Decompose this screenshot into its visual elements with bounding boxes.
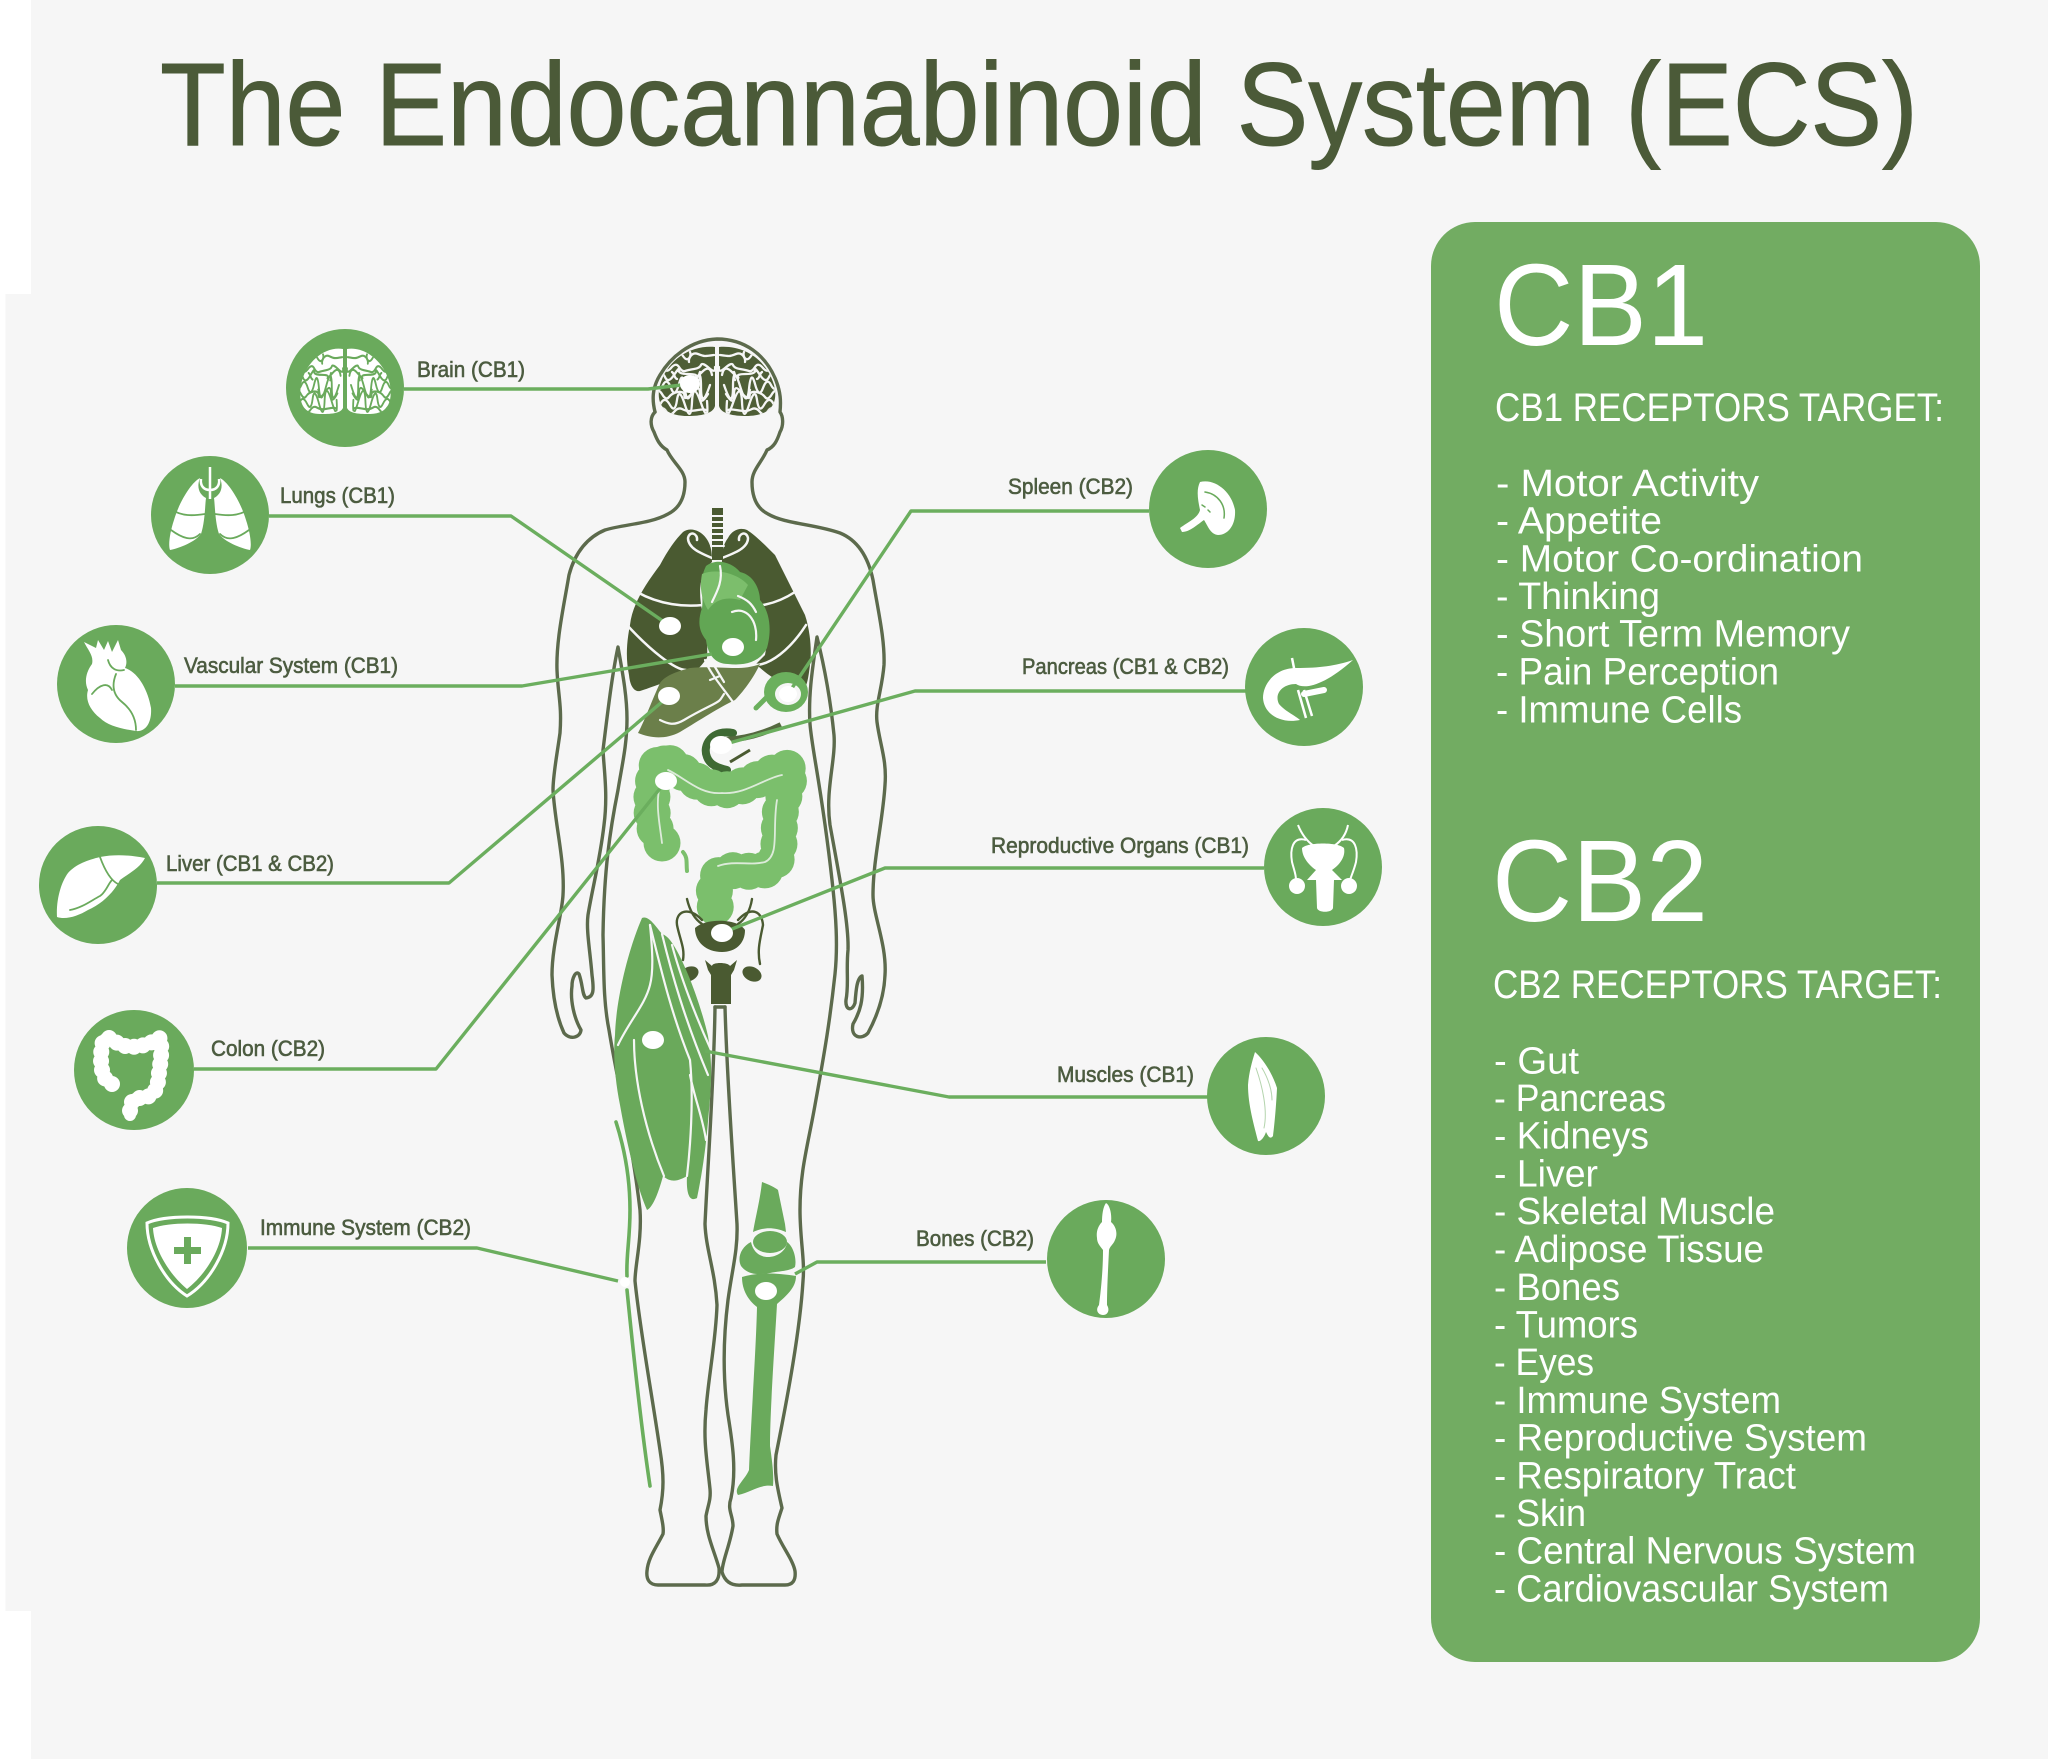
icon: heart xyxy=(57,625,175,743)
CB2 target list: - Gut xyxy=(1494,1040,1579,1082)
CB2 target list: - Cardiovascular System xyxy=(1494,1568,1889,1610)
marker dots xyxy=(642,375,797,1300)
organ: leg bones xyxy=(737,1182,796,1495)
CB1 target list: - Short Term Memory xyxy=(1496,614,1850,656)
organ: lungs and trachea xyxy=(627,508,811,691)
icon: bone xyxy=(1047,1200,1165,1318)
CB1 subheading: CB1 RECEPTORS TARGET: xyxy=(1495,386,1944,430)
organ: thigh muscles xyxy=(614,917,711,1210)
CB2 target list: - Skeletal Muscle xyxy=(1494,1191,1775,1233)
icon: immune shield xyxy=(127,1188,247,1308)
labels: Pancreas (CB1 & CB2) xyxy=(1022,654,1229,679)
icon: lungs xyxy=(151,456,269,574)
icon: pancreas xyxy=(1245,628,1363,746)
labels xyxy=(166,357,1249,1251)
CB1 target list: - Pain Perception xyxy=(1496,652,1779,694)
CB2 target list: - Bones xyxy=(1494,1267,1620,1309)
CB2 target list xyxy=(1494,1040,1916,1610)
CB2 target list: - Tumors xyxy=(1494,1304,1638,1346)
icon: spleen xyxy=(1149,450,1267,568)
icon: colon xyxy=(74,1010,194,1130)
CB2 target list: - Respiratory Tract xyxy=(1494,1456,1796,1498)
icon: reproductive organs xyxy=(1264,808,1382,926)
organ: liver xyxy=(638,660,760,737)
CB2 target list: - Pancreas xyxy=(1494,1078,1666,1120)
organ: brain xyxy=(652,347,782,416)
organ: skin line xyxy=(616,1122,650,1486)
CB2 heading: CB2 xyxy=(1492,816,1708,946)
CB1 target list: - Motor Co-ordination xyxy=(1496,538,1863,580)
CB2 target list: - Reproductive System xyxy=(1494,1418,1867,1460)
labels: Brain (CB1) xyxy=(417,357,525,382)
organ: pancreas xyxy=(706,725,781,770)
labels: Vascular System (CB1) xyxy=(184,653,398,678)
CB2 target list: - Central Nervous System xyxy=(1494,1531,1916,1573)
labels: Immune System (CB2) xyxy=(260,1215,471,1240)
organ: heart xyxy=(699,562,770,664)
labels: Reproductive Organs (CB1) xyxy=(991,833,1249,858)
CB2 subheading: CB2 RECEPTORS TARGET: xyxy=(1493,963,1942,1007)
labels: Muscles (CB1) xyxy=(1057,1062,1194,1087)
human body outline xyxy=(552,339,885,1585)
panel: receptor targets xyxy=(1431,222,1980,1662)
CB1 target list: - Appetite xyxy=(1496,500,1662,542)
labels: Lungs (CB1) xyxy=(280,483,395,508)
CB2 target list: - Kidneys xyxy=(1494,1116,1649,1158)
CB2 target list: - Adipose Tissue xyxy=(1494,1229,1764,1271)
connector lines xyxy=(157,384,1264,1281)
labels: Spleen (CB2) xyxy=(1008,474,1133,499)
CB1 target list: - Thinking xyxy=(1496,576,1660,618)
CB1 target list: - Immune Cells xyxy=(1496,690,1742,732)
CB1 target list: - Motor Activity xyxy=(1496,463,1759,505)
icon: liver xyxy=(39,826,157,944)
CB2 target list: - Eyes xyxy=(1494,1342,1594,1384)
icon: brain xyxy=(286,329,404,447)
CB1 heading: CB1 xyxy=(1494,240,1708,370)
CB1 target list xyxy=(1496,463,1863,732)
labels: Liver (CB1 & CB2) xyxy=(166,851,334,876)
CB2 target list: - Immune System xyxy=(1494,1380,1781,1422)
organ: colon xyxy=(652,760,790,914)
organ: reproductive system xyxy=(677,899,764,1004)
CB2 target list: - Liver xyxy=(1494,1154,1598,1196)
organ: spleen xyxy=(756,672,808,712)
icon: muscle xyxy=(1207,1037,1325,1155)
CB2 target list: - Skin xyxy=(1494,1493,1586,1535)
labels: Bones (CB2) xyxy=(916,1226,1034,1251)
title: The Endocannabinoid System (ECS) xyxy=(160,39,1918,171)
labels: Colon (CB2) xyxy=(211,1036,325,1061)
